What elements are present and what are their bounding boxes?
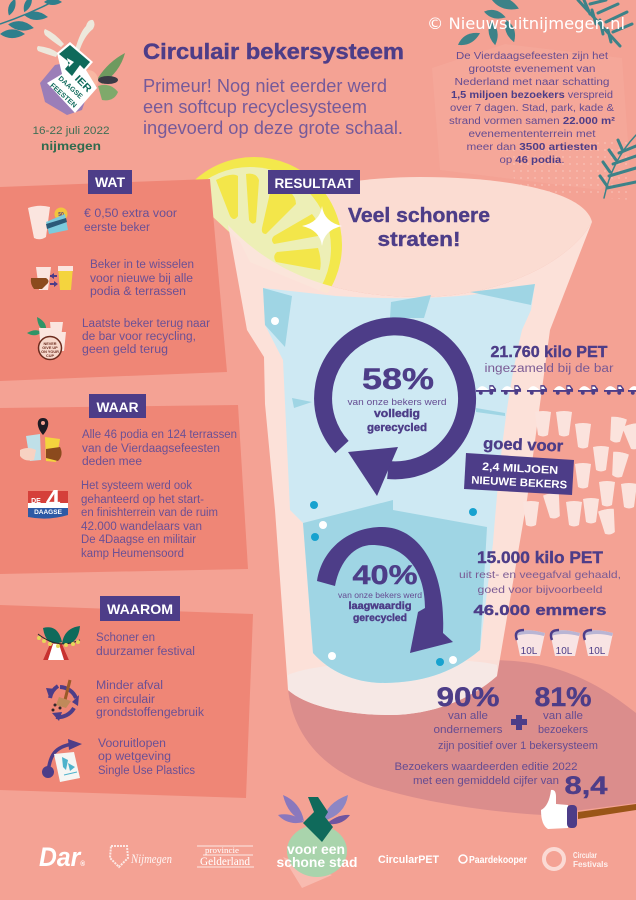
heading: veel schonere straten [348,205,490,251]
text: waardering [394,761,578,787]
logo: circular festivals: Circular [573,851,597,860]
decorative pale blob behind intro text [432,44,630,200]
text: wat 2: Beker in te wisselen [90,259,194,271]
stat: 15.000 kilo PET: goed voor bijvoorbeeld [478,584,603,596]
text: waarom 3: Vooruitlopen [98,738,166,750]
heading: title: Circulair bekersysteem [143,39,404,64]
text: waar 2: en finishterrein van de ruim [81,507,218,519]
text: waar 2: De 4Daagse en militair [81,534,196,546]
stat: 40 percent [338,560,422,624]
text: waarom 2: Minder afval [96,680,163,692]
stat: 90 percent: 90% [436,682,500,712]
icon: cup and card [28,206,68,239]
stat: 40 percent: laagwaardig [348,601,412,612]
callout: 2,4 miljoen nieuwe bekers: NIEUWE BEKERS [471,475,567,492]
text block: subtitle [143,76,403,138]
text: waar 1: van de Vierdaagsefeesten [82,443,220,455]
icon: festival tent [37,626,80,660]
panel: wat [0,179,227,381]
stat: 8,4: 8,4 [564,772,608,800]
logo: provincie gelderland: Gelderland [200,854,250,868]
icon: never give up on your cup [27,317,66,360]
logo: nijmegen [110,846,172,867]
text: waarom 3: Single Use Plastics [98,765,195,777]
icon: de 4daagse: DE [31,498,41,505]
icon: thumbs up [541,790,636,829]
text: wat 1: eerste beker [84,222,150,234]
label: wat [88,170,132,194]
logo: vierdaagsefeesten: DAAGSE [57,75,84,101]
text: waarom 2 [96,680,204,719]
icon: cup and card: 50 [58,212,64,218]
leaves: fern right [600,135,636,198]
text block: intro: op 46 podia . [500,155,564,166]
stat: 81 percent: 81% [534,682,592,712]
icon: never give up on your cup: NEVER [43,342,57,346]
icon: swap cups [31,266,73,290]
icon: plus [511,715,527,730]
logo: nijmegen: Nijmegen [130,851,172,866]
label: resultaat: RESULTAAT [274,176,354,191]
icon: buckets: 10L [589,646,606,657]
text: waarom 3: op wetgeving [98,751,171,763]
stat: 15.000 kilo PET: 46.000 emmers [474,602,606,619]
stat: 58 percent: volledig [374,408,420,420]
logo: voor een schone stad [276,795,358,888]
icon: de 4daagse: DAAGSE [34,509,63,516]
stat: 15.000 kilo PET: uit rest- en veegafval gehaald, [459,569,621,581]
icon: buckets [515,630,613,657]
label: waarom [100,596,180,621]
stat: 90 percent: ondernemers [434,724,503,736]
text block: subtitle: een softcup recyclesysteem [143,97,367,117]
stat: 15.000 kilo PET [459,548,621,619]
heading: veel schonere straten: Veel schonere [348,205,490,227]
arrow: 40 percent [317,527,453,653]
text: wat 1 [84,208,177,234]
leaves: top left [0,0,62,38]
logo: paardekooper: Paardekooper [469,855,527,866]
text: wat 2: podia & terrassen [90,286,186,298]
text: wat 3: geen geld terug [82,344,168,356]
logo: voor een schone stad: schone stad [276,854,358,870]
text: waar 2: kamp Heumensoord [81,548,184,560]
icon: never give up on your cup: CUP [46,354,54,358]
text block: intro: grootste evenement van [468,64,596,75]
callout: 2,4 miljoen nieuwe bekers [464,453,574,495]
text: waarom 1: Schoner en [96,632,155,644]
icon: never give up on your cup: ON YOUR [41,350,59,354]
icon: forward arrow and document [42,739,82,782]
text: waar 2 [81,480,218,560]
panel: waarom [0,605,253,798]
stat: 58 percent: van onze bekers werd [348,397,446,408]
text: waar 2: Het systeem werd ook [81,480,192,492]
logo: vierdaagsefeesten: FEESTEN [48,82,78,110]
water [263,284,535,683]
text: waardering: Bezoekers waardeerden editie 2022 [394,761,578,773]
label: waarom: WAAROM [107,602,173,617]
arrow: 58 percent ring [323,326,467,496]
icon: de 4daagse [28,484,68,519]
stat: 81 percent [534,682,592,736]
logo: circular festivals [544,849,609,869]
glass base [288,660,497,715]
text: wat 3 [82,318,210,356]
lemon slice [196,157,342,286]
stat: 58 percent [348,363,446,434]
sparkle [302,206,342,246]
stat: 81 percent: bezoekers [538,724,588,736]
bubbles [271,317,477,666]
stat: 21.760 kilo PET: ingezameld bij de bar [484,363,614,375]
text: waarom 1 [96,632,195,658]
text block: intro: 1,5 miljoen bezoekers verspreid [451,90,613,101]
stat: 40 percent: gerecycled [353,613,407,624]
text block: intro: De Vierdaagsefeesten zijn het [456,51,608,62]
glass rim back [228,177,592,297]
icon: trucks [476,385,636,395]
stat: 90 percent [434,682,503,736]
text block: intro: meer dan 3500 artiesten [466,142,598,153]
panel: waar [0,405,248,574]
stat: 90 percent: van alle [448,710,488,722]
leaves: top right [456,0,632,49]
text: waar 2: 42.000 wandelaars van [81,521,202,533]
text: wat 3: de bar voor recycling, [82,331,196,343]
text: positief: zijn positief over 1 bekersysteem [438,740,598,752]
text: waarom 2: en circulair [96,694,155,706]
text: waar 2: gehanteerd op het start- [81,494,204,506]
stat: 21.760 kilo PET: 21.760 kilo PET [490,344,608,361]
logo: circularpet: CircularPET [378,854,439,866]
icon: buckets: 10L [521,646,538,657]
text block: subtitle: Primeur! Nog niet eerder werd [143,76,387,96]
text block: intro: over 7 dagen. Stad, park, kade & [450,103,614,114]
text: waarom 1: duurzamer festival [96,646,195,658]
watermark: © Nieuwsuitnijmegen.nl [427,14,625,33]
stat: 58 percent: gerecycled [367,422,427,434]
stat: 15.000 kilo PET: 15.000 kilo PET [477,548,604,567]
text: wat 2: voor nieuwe bij alle [90,273,193,285]
icon: de 4daagse: 4 [46,484,61,514]
location: nijmegen [41,139,101,153]
date: 16-22 juli 2022 [32,125,110,137]
logo: provincie gelderland: provincie [205,845,239,855]
shadow under glass [288,660,636,815]
text: wat 2 [90,259,194,298]
text: waarom 2: grondstoffengebruik [96,707,204,719]
text block: intro: evenemententerrein met [468,129,596,140]
text block: intro [449,51,616,166]
heading: veel schonere straten: straten! [378,229,460,251]
text: waardering: met een gemiddeld cijfer van [413,775,559,787]
text: waar 1: Alle 46 podia en 124 terrassen [82,429,237,441]
logo: provincie gelderland [197,845,254,868]
label: waar: WAAR [96,400,139,415]
text block: intro: strand vormen samen 22.000 m² [449,116,616,127]
label: wat: WAT [95,175,126,190]
text: waar 1 [82,429,237,468]
icon: pin and cheers [20,418,62,462]
stat: 81 percent: van alle [543,710,583,722]
label: waar [89,394,146,418]
text: wat 1: € 0,50 extra voor [84,208,177,220]
text: wat 3: Laatste beker terug naar [82,318,210,330]
logo: circular festivals: Festivals [573,860,609,869]
text block: subtitle: ingevoerd op deze grote schaal. [143,118,403,138]
logo: vierdaagsefeesten [37,20,125,115]
text: waarom 3 [98,738,195,777]
text: waar 1: deden mee [82,456,142,468]
logo: voor een schone stad: voor een [287,841,345,857]
text: goed voor: goed voor [483,436,563,455]
logo: dar: Dar® [39,842,86,872]
logo: vierdaagsefeesten: IER [72,74,94,95]
icon: cups [523,411,636,536]
icon: buckets: 10L [556,646,573,657]
callout: 2,4 miljoen nieuwe bekers: 2,4 MILJOEN [482,461,558,477]
stat: 21.760 kilo PET [484,344,614,375]
stat: 40 percent: van onze bekers werd [338,590,422,600]
label: resultaat [268,170,360,194]
glass body [228,222,592,715]
icon: never give up on your cup: GIVE UP [42,346,58,350]
stat: 40 percent: 40% [352,560,418,590]
stat: 58 percent: 58% [362,363,434,396]
icon: broom and recycle arrows [46,680,79,721]
text block: intro: Nederland met naar schatting [454,77,610,88]
